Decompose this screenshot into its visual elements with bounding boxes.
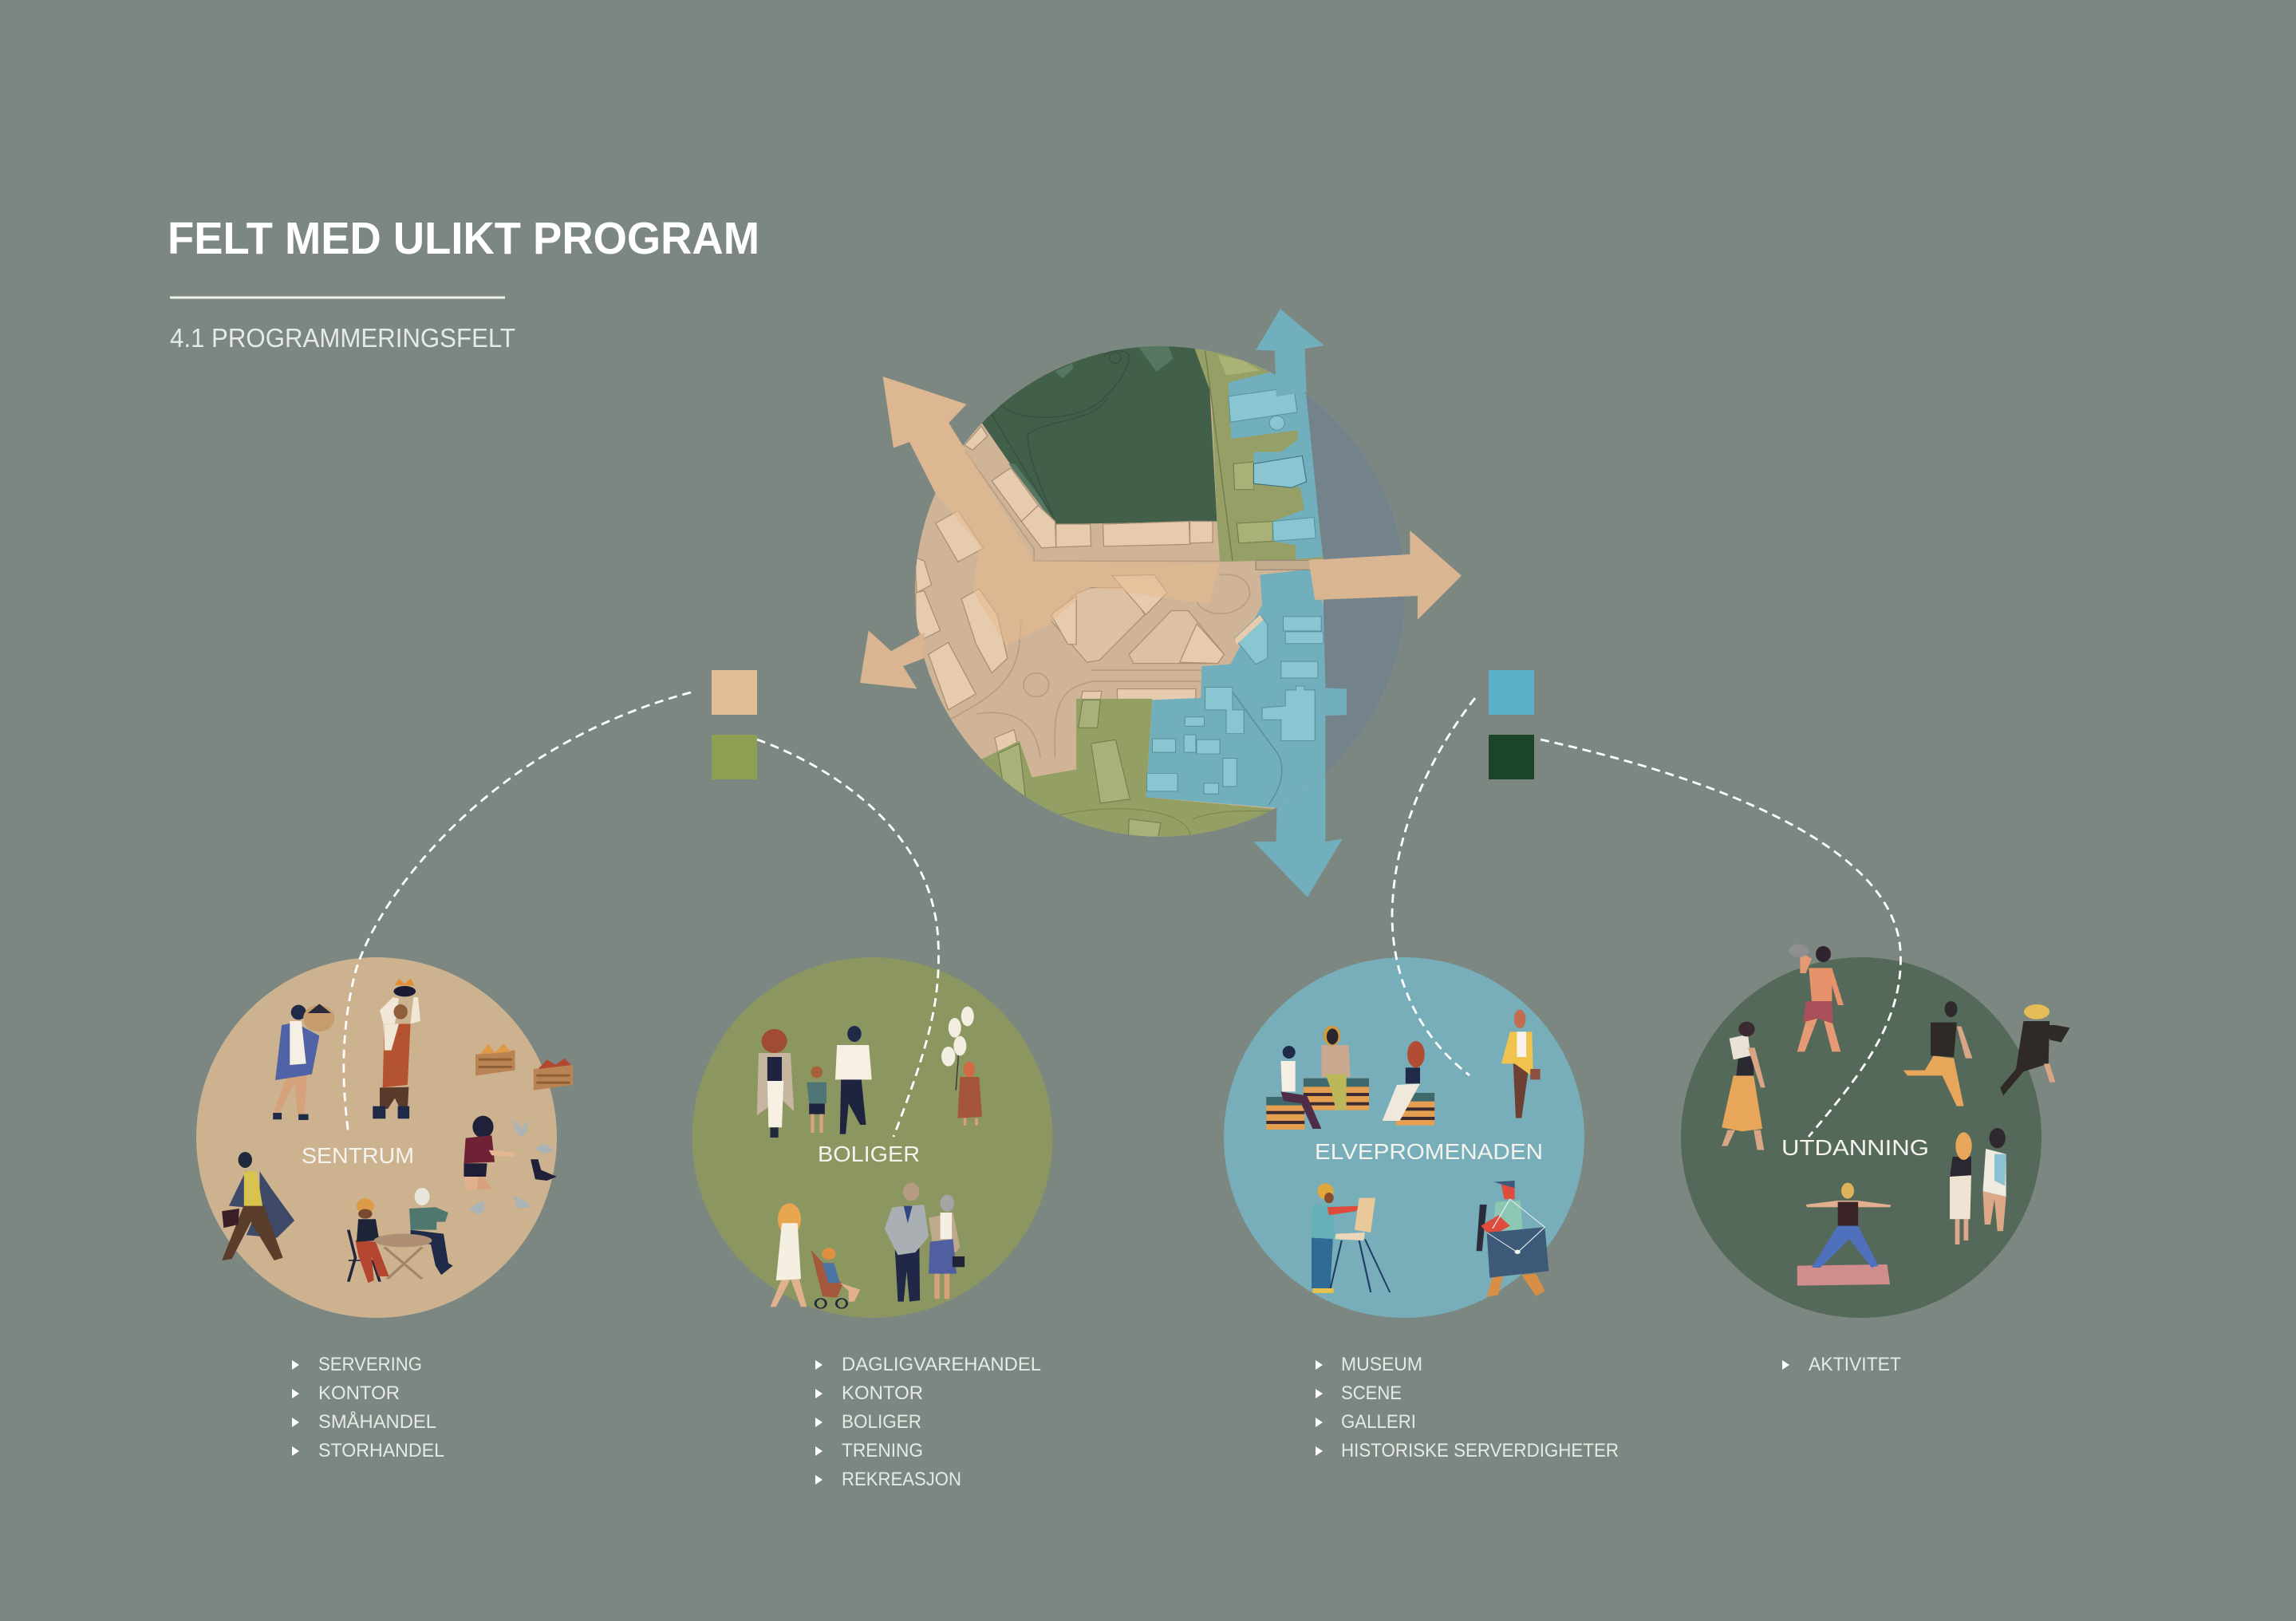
tan zone roads — [949, 450, 1272, 758]
list: boliger: DAGLIGVAREHANDEL — [842, 1354, 1041, 1375]
list: sentrum: SERVERING — [318, 1354, 422, 1375]
figure: person with large envelope — [1477, 1181, 1548, 1297]
figure: woman with stroller — [770, 1203, 860, 1308]
circular site plan — [914, 346, 1406, 837]
figure: man with basket — [273, 1004, 334, 1120]
panel: utdanning circle — [1681, 957, 2042, 1318]
figure: male runner — [1903, 1001, 1972, 1106]
figure: woman in orange skirt — [1722, 1022, 1765, 1150]
figure: girl with balloons — [941, 1007, 982, 1126]
legend: blue square — [1489, 670, 1534, 715]
legend: olive square — [712, 735, 757, 779]
figure: cafe table with two women — [349, 1188, 453, 1283]
panel: sentrum circle — [196, 957, 557, 1318]
figure: man with briefcase — [222, 1152, 294, 1260]
list: boliger: BOLIGER — [842, 1411, 921, 1433]
figure: group on benches — [1266, 1026, 1434, 1130]
list: boliger: KONTOR — [842, 1382, 923, 1404]
illustrations: elvepromenaden and utdanning people — [1266, 944, 2070, 1297]
dashed connector lines — [344, 692, 1900, 1137]
list: sentrum — [292, 1354, 444, 1461]
list: elvepromenaden: MUSEUM — [1341, 1354, 1422, 1375]
label: elvepromenaden: ELVEPROMENADEN — [1315, 1139, 1543, 1164]
tan buildings — [915, 426, 1213, 754]
list: sentrum: SMÅHANDEL — [318, 1410, 436, 1433]
olive zone north — [1193, 343, 1324, 562]
list: boliger: REKREASJON — [842, 1469, 961, 1490]
list: sentrum: KONTOR — [318, 1382, 400, 1404]
figure: woman carrying pot — [373, 979, 420, 1118]
arrow: north-west tan — [883, 377, 966, 494]
figure: two women — [1950, 1128, 2006, 1244]
central plaza blocks — [1051, 575, 1224, 664]
illustrations: sentrum and boliger people — [222, 979, 982, 1308]
title: FELT MED ULIKT PROGRAM — [168, 213, 759, 264]
label: utdanning: UTDANNING — [1781, 1135, 1929, 1160]
figure: family with child — [757, 1026, 872, 1138]
figure: elderly couple — [885, 1183, 965, 1302]
list: utdanning: AKTIVITET — [1809, 1354, 1901, 1375]
olive zone south — [981, 699, 1274, 837]
figure: woman in yellow jacket — [1501, 1010, 1541, 1118]
figure: female runner — [2000, 1004, 2070, 1095]
legend: tan square — [712, 670, 757, 715]
list: elvepromenaden: SCENE — [1341, 1382, 1402, 1404]
figure: woman feeding birds — [464, 1116, 515, 1190]
subtitle: 4.1 PROGRAMMERINGSFELT — [170, 324, 515, 353]
panel: central site map with arrows — [860, 309, 1462, 897]
list: elvepromenaden — [1316, 1354, 1619, 1461]
blue zone south — [1146, 569, 1347, 808]
list: sentrum: STORHANDEL — [318, 1440, 444, 1461]
panel: boliger circle — [692, 957, 1053, 1318]
label: boliger: BOLIGER — [818, 1142, 920, 1166]
arrow: south-west tan — [860, 630, 925, 688]
figure: yoga pose on mat — [1797, 1183, 1892, 1286]
arrow: south blue — [1253, 773, 1343, 897]
figure: painter at easel — [1312, 1183, 1390, 1293]
list: elvepromenaden: GALLERI — [1341, 1411, 1416, 1433]
translucent tan zone over the plan — [936, 448, 1220, 646]
arrow: east tan — [1308, 530, 1462, 620]
dark green park zone — [981, 346, 1217, 523]
icon: fruit crates — [475, 1043, 573, 1091]
blue zone north — [1229, 370, 1323, 559]
icon: birds — [468, 1118, 557, 1215]
arrow: north blue — [1256, 309, 1324, 396]
label: sentrum: SENTRUM — [302, 1143, 414, 1168]
figure: man with dumbbell — [1789, 944, 1844, 1051]
legend: dark green square — [1489, 735, 1534, 779]
panel: elvepromenaden circle — [1224, 957, 1584, 1318]
list: elvepromenaden: HISTORISKE SERVERDIGHETER — [1341, 1440, 1619, 1461]
list: boliger: TRENING — [842, 1440, 923, 1461]
list: boliger — [815, 1354, 1041, 1490]
